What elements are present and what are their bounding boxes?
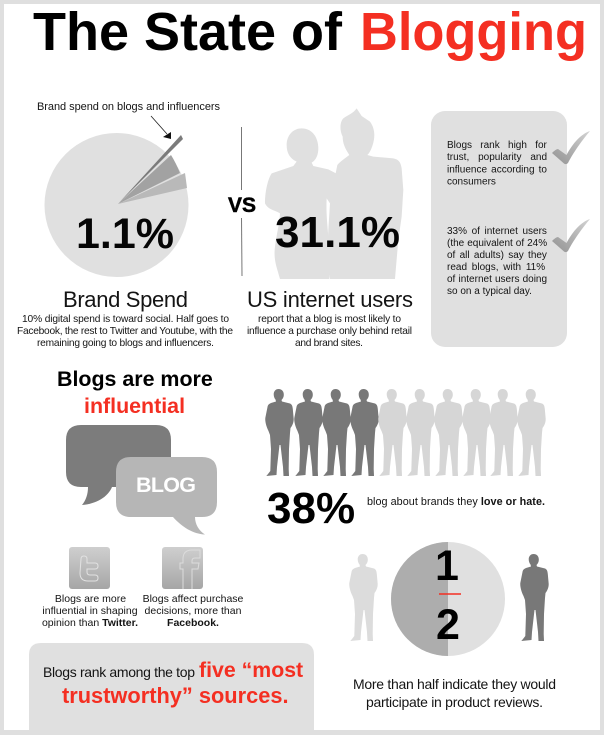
stat: 38%: 38%: [267, 484, 355, 533]
twitter caption: Blogs are more: [55, 593, 126, 605]
panel: 38 percent: [265, 389, 546, 533]
US internet users description: report that a blog is most likely to: [258, 314, 401, 325]
heading accent: influential: [84, 394, 185, 418]
heading: Blogs are more: [57, 367, 213, 391]
icon: dark person: [520, 554, 549, 641]
trust text 1: Blogs rank high for: [447, 140, 548, 151]
product reviews caption: More than half indicate they would: [353, 676, 556, 692]
product reviews caption: [353, 676, 556, 710]
panel: trust callout: [431, 111, 590, 347]
title: The State of: [33, 2, 343, 62]
pie label: Brand spend on blogs and influencers: [37, 101, 220, 113]
facebook caption: Facebook.: [167, 617, 219, 629]
trust text 1: [447, 140, 548, 188]
pie chart: [44, 133, 188, 277]
trust text 1: influence according to: [447, 164, 547, 176]
couple silhouette: [265, 108, 403, 279]
panel: US internet users: [247, 108, 413, 349]
arrow: [151, 116, 171, 139]
trust text 2: of internet users doing: [447, 274, 547, 285]
heading: US internet users: US internet users: [247, 287, 413, 312]
icon: light speech bubble: [116, 457, 217, 534]
icon: light speech bubble: BLOG: [136, 473, 196, 497]
title: [33, 2, 587, 62]
product reviews caption: participate in product reviews.: [366, 694, 543, 710]
facebook caption: decisions, more than: [145, 605, 242, 617]
icon: check mark 1: [552, 131, 590, 164]
US internet users description: and brand sites.: [295, 338, 363, 349]
brand spend description: Facebook, the rest to Twitter and Youtube, with the: [17, 326, 233, 337]
trust text 2: so on a typical day.: [447, 286, 532, 297]
fraction: 2: [436, 601, 460, 649]
panel: blogs are more influential: [42, 367, 244, 629]
trust statement: Blogs rank among the top: [43, 664, 195, 680]
trust text 2: [447, 226, 547, 297]
US internet users description: influence a purchase only behind retail: [247, 326, 412, 337]
facebook caption: Blogs affect purchase: [143, 593, 244, 605]
38 percent description: blog about brands they love or hate.: [367, 496, 545, 508]
icon: check mark 2: [552, 219, 590, 252]
trust text 2: of all adults) say they: [447, 250, 547, 261]
facebook caption: [143, 593, 244, 629]
trust text 2: 33% of internet users: [447, 226, 547, 237]
panel: trustworthy sources: [29, 643, 314, 730]
trust text 1: consumers: [447, 176, 496, 188]
trust statement: [43, 658, 303, 708]
icon: light person: [349, 554, 378, 641]
twitter caption: [42, 593, 138, 629]
heading: Brand Spend: Brand Spend: [63, 287, 188, 312]
brand spend description: 10% digital spend is toward social. Half goes to: [22, 314, 229, 325]
icon: dark speech bubble: [66, 425, 171, 505]
twitter caption: influential in shaping: [42, 605, 138, 617]
trust statement: trustworthy” sources.: [62, 683, 288, 708]
brand spend description: remaining going to blogs and influencers.: [37, 338, 214, 349]
versus divider: VS: [228, 194, 256, 217]
fraction: [435, 542, 461, 649]
trust statement: five “most: [199, 658, 303, 682]
trust text 2: (the equivalent of 24%: [447, 238, 547, 249]
fraction: 1: [435, 542, 459, 590]
people row: 4 of 10 highlighted: [265, 389, 546, 476]
twitter caption: opinion than Twitter.: [42, 617, 138, 629]
stat: 1.1%: 1.1%: [76, 210, 174, 258]
icon: twitter: [69, 547, 110, 589]
trust text 2: read blogs, with 11%: [447, 262, 545, 273]
panel: brand spend: [17, 101, 233, 349]
title: Blogging: [360, 2, 587, 62]
half pie: [391, 542, 505, 656]
US internet users description: [247, 314, 412, 349]
panel: one in two: [349, 542, 556, 710]
stat: 31.1%: 31.1%: [275, 208, 400, 257]
icon: facebook: [162, 547, 203, 589]
brand spend description: [17, 314, 233, 349]
trust text 1: trust, popularity and: [447, 152, 547, 163]
